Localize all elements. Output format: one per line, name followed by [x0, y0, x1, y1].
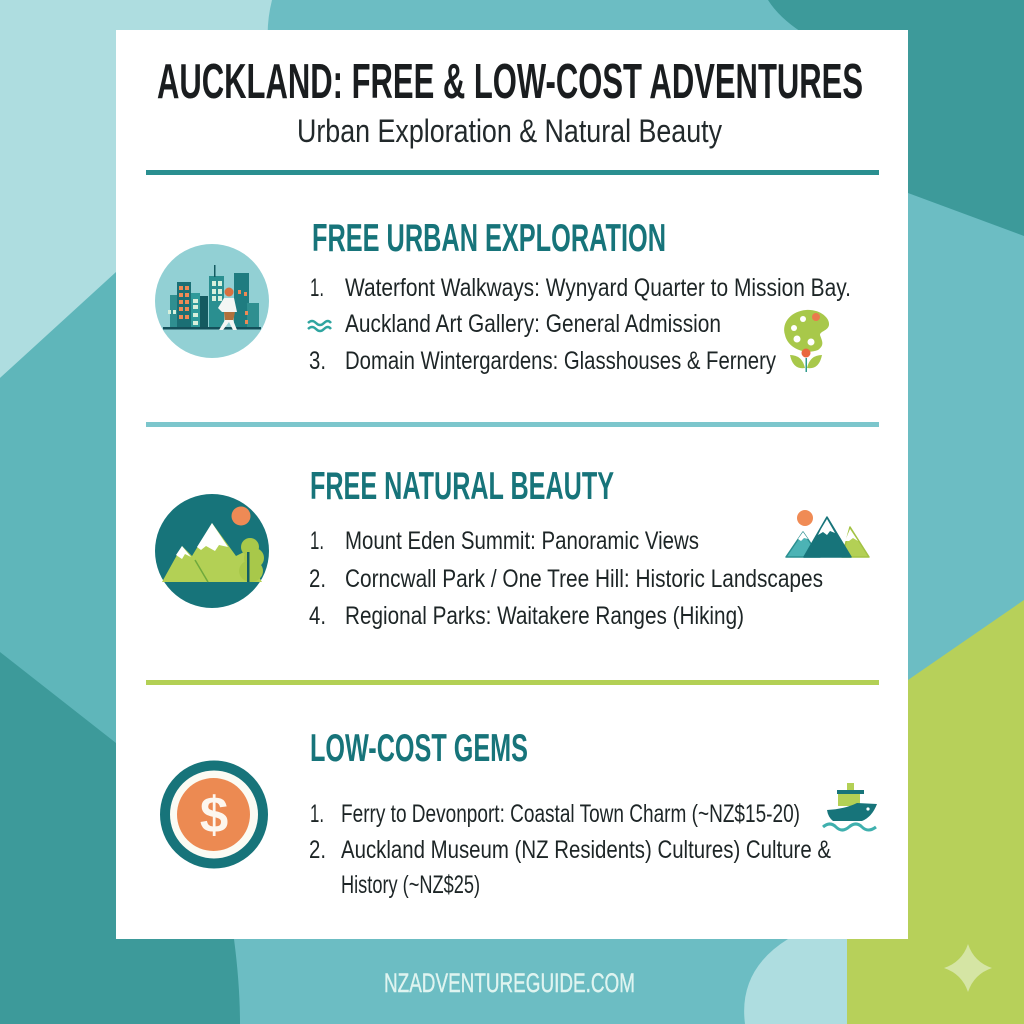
heading: free natural beauty: FREE NATURAL BEAUTY [310, 465, 614, 508]
icon: city walker [155, 244, 269, 358]
icon: dollar coin [165, 766, 263, 864]
white card [116, 30, 908, 939]
subtitle: Urban Exploration & Natural Beauty [297, 113, 722, 149]
list text 1: Ferry to Devonport: Coastal Town Charm (~NZ$15-20) [341, 800, 800, 828]
list text 1: Mount Eden Summit: Panoramic Views [345, 527, 699, 555]
footer url: NZADVENTUREGUIDE.COM [384, 968, 635, 998]
list number 1: 1. [310, 527, 324, 555]
list text 2: Auckland Art Gallery: General Admission [345, 310, 721, 338]
panel: free natural beauty [155, 465, 869, 630]
icon: palette flower [784, 310, 829, 372]
divider: light teal [146, 422, 879, 427]
panel: low-cost gems [165, 727, 877, 899]
divider: teal [146, 170, 879, 175]
icon: waves bullet [308, 321, 331, 331]
list number 1: 1. [310, 800, 324, 828]
icon: dollar coin: $ [200, 786, 228, 843]
icon: small mountains [786, 510, 869, 557]
list item 3 number: 3. [309, 347, 326, 375]
heading: low-cost gems: LOW-COST GEMS [310, 727, 528, 770]
list text 2 continued: History (~NZ$25) [341, 871, 480, 899]
list text 3: Domain Wintergardens: Glasshouses & Fernery [345, 347, 776, 375]
list text 1: Waterfont Walkways: Wynyard Quarter to Mission Bay. [345, 274, 851, 302]
panel: free urban exploration [155, 217, 851, 375]
icon: sparkle [944, 944, 992, 992]
icon: ferry [823, 783, 877, 830]
list number 4: 4. [309, 602, 326, 630]
heading: free urban exploration: FREE URBAN EXPLORATION [312, 217, 666, 260]
icon: mountains circle [155, 494, 269, 608]
list text 4: Regional Parks: Waitakere Ranges (Hiking) [345, 602, 744, 630]
list text 2: Auckland Museum (NZ Residents) Cultures) Culture & [341, 836, 831, 864]
list number 2: 2. [309, 836, 326, 864]
divider: green [146, 680, 879, 685]
list text 2: Corncwall Park / One Tree Hill: Historic Landscapes [345, 565, 823, 593]
list number 2: 2. [309, 565, 326, 593]
list item 1: 1. [310, 274, 324, 302]
